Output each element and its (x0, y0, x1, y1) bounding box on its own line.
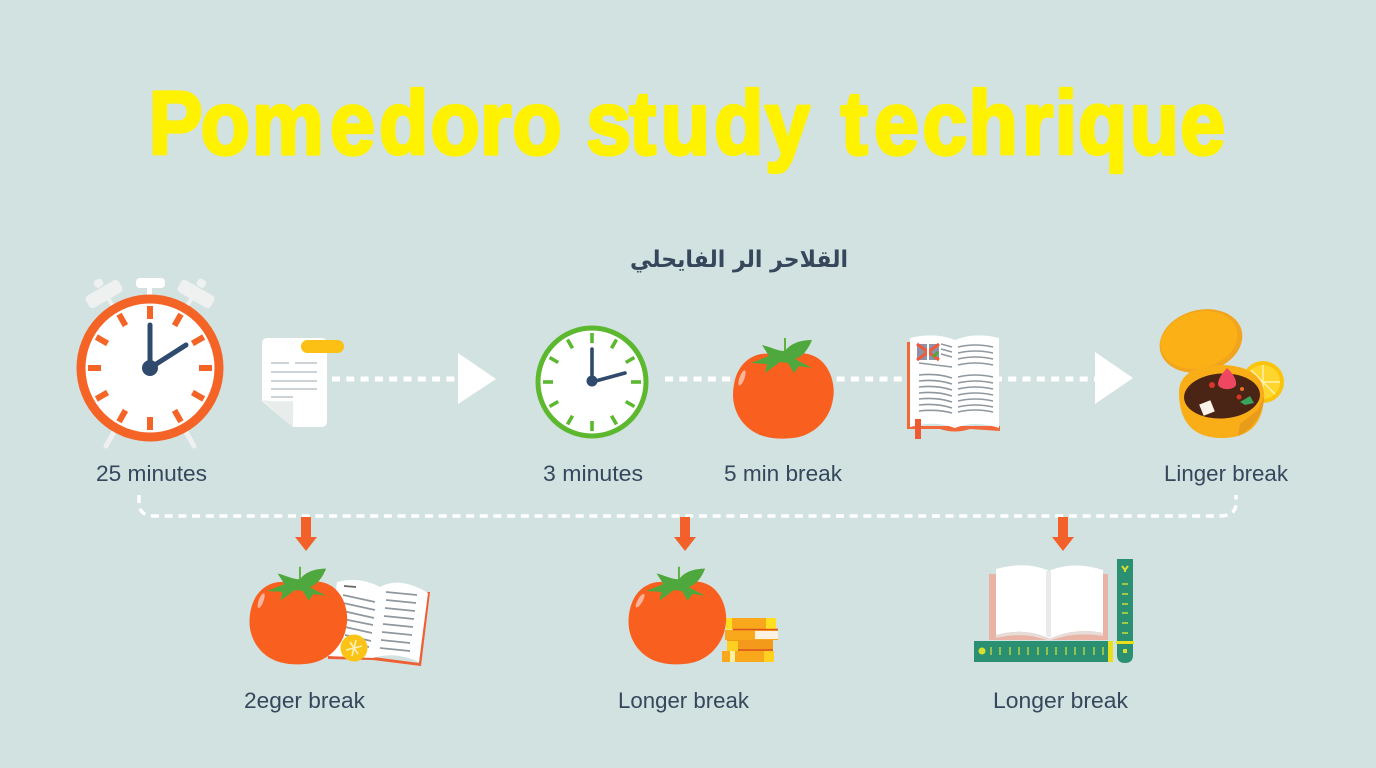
icon: open book and rulers (974, 559, 1134, 663)
arrow: dashed flow through tomato and book (665, 352, 1133, 404)
arrow: down 1 (295, 517, 317, 551)
title: techrique (841, 73, 1225, 174)
label: 25 minutes: 25 minutes (96, 461, 207, 486)
icon: book behind tomato with orange slice (328, 580, 430, 666)
icon: alarm clock 25 minutes (81, 278, 219, 446)
lid (1152, 300, 1250, 382)
arrow: down 2 (674, 517, 696, 551)
bowl (1179, 365, 1264, 438)
arrow: down 3 (1052, 517, 1074, 551)
label: Longer break right: Longer break (993, 688, 1129, 713)
icon: tomato (733, 338, 834, 439)
label: 5 min break: 5 min break (724, 461, 843, 486)
icon: green clock 3 minutes (538, 328, 646, 436)
title: Pomedoro (149, 73, 562, 174)
icon: stack of books (722, 618, 778, 662)
icon: lunch box (1152, 300, 1284, 438)
label: Longer break center: Longer break (618, 688, 750, 713)
icon: tomato with books (628, 567, 726, 664)
lemon slice (1242, 361, 1284, 403)
icon: document note (262, 338, 344, 427)
icon: tomato with book (250, 567, 347, 664)
title (149, 73, 1225, 174)
label: Linger break: Linger break (1164, 461, 1289, 486)
arrow: dashed flow to triangle 1 (332, 353, 496, 404)
icon: open book with flag (907, 335, 1000, 439)
subtitle: القلاحر الر الفايحلي (630, 247, 848, 273)
label: 2eger break: 2eger break (244, 688, 366, 713)
connector: dashed bracket (139, 495, 1236, 516)
title: study (586, 73, 810, 174)
label: 3 minutes: 3 minutes (543, 461, 643, 486)
